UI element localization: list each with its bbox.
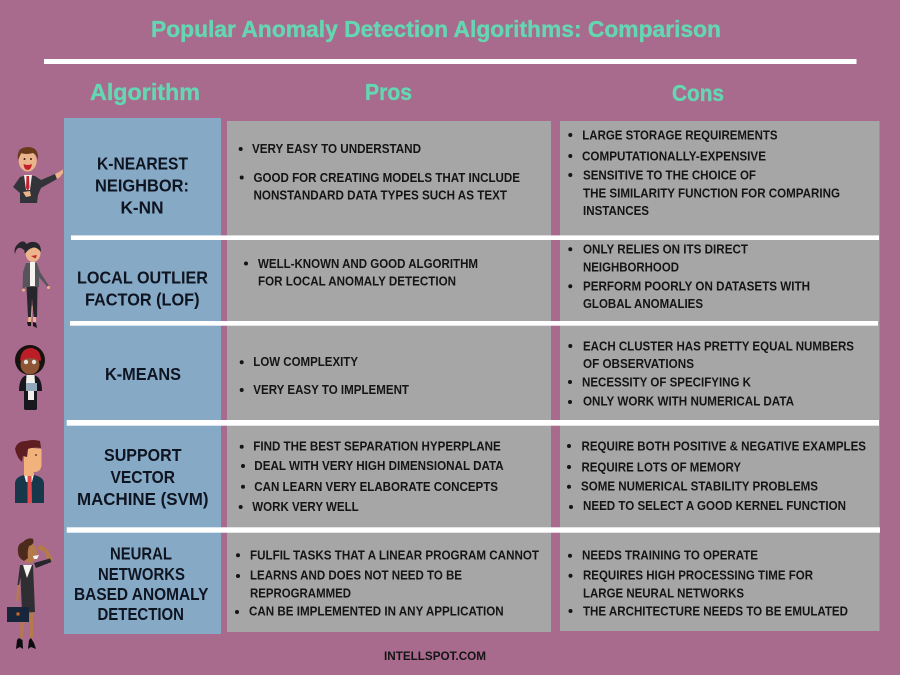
title: Popular Anomaly Detection Algorithms: Comparison (151, 16, 721, 42)
algorithm name: K-Means: K-MEANS (105, 364, 181, 384)
pros: SVM: WORK VERY WELL (252, 499, 359, 514)
pros: K-Means: LOW COMPLEXITY (253, 354, 358, 369)
panel: pros column (227, 121, 551, 632)
algorithm name: K-NN (95, 153, 189, 217)
pros: K-Means (240, 354, 409, 397)
footer: source: INTELLSPOT.COM (384, 649, 486, 663)
icon: woman with briefcase (7, 538, 53, 649)
algorithm name: K-NN: K-NEAREST (97, 153, 188, 173)
pros: Neural Networks: REPROGRAMMED (250, 585, 351, 600)
cons: SVM (567, 438, 866, 513)
algorithm name: SVM: SUPPORT (104, 445, 182, 465)
panel: cons column (560, 121, 880, 631)
pros: SVM: DEAL WITH VERY HIGH DIMENSIONAL DATA (254, 458, 504, 473)
pros: Neural Networks: CAN BE IMPLEMENTED IN ANY APPLICATION (249, 604, 504, 619)
pros: LOF: FOR LOCAL ANOMALY DETECTION (258, 274, 456, 288)
icon: man pointing (13, 147, 63, 203)
cons: SVM: REQUIRE BOTH POSITIVE & NEGATIVE EXAMPLES (582, 438, 866, 453)
cons: Neural Networks: THE ARCHITECTURE NEEDS TO BE EMULATED (583, 603, 848, 618)
algorithm name: LOF: LOCAL OUTLIER (77, 267, 208, 287)
cons: Neural Networks: LARGE NEURAL NETWORKS (583, 585, 744, 600)
cons: Neural Networks: NEEDS TRAINING TO OPERATE (582, 547, 758, 562)
cons: K-Means (568, 338, 854, 409)
pros: Neural Networks: LEARNS AND DOES NOT NEED TO BE (250, 568, 462, 583)
cons: K-Means: OF OBSERVATIONS (583, 356, 694, 371)
algorithm name: LOF: FACTOR (LOF) (85, 289, 200, 309)
cons: SVM: NEED TO SELECT A GOOD KERNEL FUNCTION (583, 498, 846, 513)
icon: man in navy suit (15, 440, 44, 503)
pros: LOF (244, 256, 478, 288)
icon: woman with ponytail (14, 241, 50, 328)
cons: K-NN: THE SIMILARITY FUNCTION FOR COMPARING (583, 185, 840, 200)
algorithm name: SVM: VECTOR (110, 467, 175, 487)
algorithm name: Neural Networks: DETECTION (98, 604, 184, 624)
algorithm name: Neural Networks: NETWORKS (98, 564, 185, 584)
column heading: Algorithm: Algorithm (90, 79, 200, 105)
pros: Neural Networks: FULFIL TASKS THAT A LINEAR PROGRAM CANNOT (250, 547, 539, 562)
cons: LOF: GLOBAL ANOMALIES (583, 296, 703, 311)
algorithm name: Neural Networks: BASED ANOMALY (74, 584, 209, 604)
pros: K-Means: VERY EASY TO IMPLEMENT (253, 382, 409, 397)
cons: K-Means: ONLY WORK WITH NUMERICAL DATA (583, 394, 795, 409)
cons: K-Means: EACH CLUSTER HAS PRETTY EQUAL NUMBERS (583, 338, 854, 353)
pros: K-NN (239, 141, 520, 202)
cons: LOF: ONLY RELIES ON ITS DIRECT (583, 242, 748, 257)
column heading: Cons: Cons (672, 80, 724, 106)
pros: K-NN: GOOD FOR CREATING MODELS THAT INCLUDE (254, 170, 520, 185)
cons: K-NN: INSTANCES (583, 203, 649, 218)
cons: LOF: NEIGHBORHOOD (583, 259, 679, 274)
cons: K-NN: SENSITIVE TO THE CHOICE OF (583, 168, 756, 183)
algorithm name: SVM (77, 445, 208, 509)
column heading: Pros: Pros (365, 79, 412, 105)
algorithm name: SVM: MACHINE (SVM) (77, 489, 208, 509)
pros: SVM (239, 438, 504, 514)
algorithm name: K-NN: K-NN (120, 197, 164, 217)
pros: SVM: FIND THE BEST SEPARATION HYPERPLANE (253, 438, 501, 453)
pros: Neural Networks (235, 547, 539, 619)
cons: LOF: PERFORM POORLY ON DATASETS WITH (583, 278, 810, 293)
algorithm name: Neural Networks (74, 543, 209, 624)
panel: algorithm column (64, 118, 221, 634)
cons: Neural Networks (568, 547, 848, 618)
cons: K-Means: NECESSITY OF SPECIFYING K (582, 374, 752, 389)
pros: K-NN: NONSTANDARD DATA TYPES SUCH AS TEXT (254, 188, 507, 202)
algorithm name: LOF (77, 267, 208, 309)
algorithm name: K-NN: NEIGHBOR: (95, 175, 189, 195)
icon: woman with red headband (15, 345, 45, 410)
cons: K-NN: LARGE STORAGE REQUIREMENTS (582, 127, 778, 142)
pros: SVM: CAN LEARN VERY ELABORATE CONCEPTS (254, 479, 498, 494)
pros: LOF: WELL-KNOWN AND GOOD ALGORITHM (258, 256, 478, 271)
cons: Neural Networks: REQUIRES HIGH PROCESSING TIME FOR (583, 568, 814, 583)
cons: SVM: REQUIRE LOTS OF MEMORY (582, 459, 741, 474)
algorithm name: Neural Networks: NEURAL (110, 543, 172, 563)
cons: K-NN: COMPUTATIONALLY-EXPENSIVE (582, 148, 766, 163)
cons: SVM: SOME NUMERICAL STABILITY PROBLEMS (581, 479, 818, 494)
pros: K-NN: VERY EASY TO UNDERSTAND (252, 141, 421, 156)
cons: LOF (568, 242, 810, 311)
cons: K-NN (568, 127, 840, 218)
